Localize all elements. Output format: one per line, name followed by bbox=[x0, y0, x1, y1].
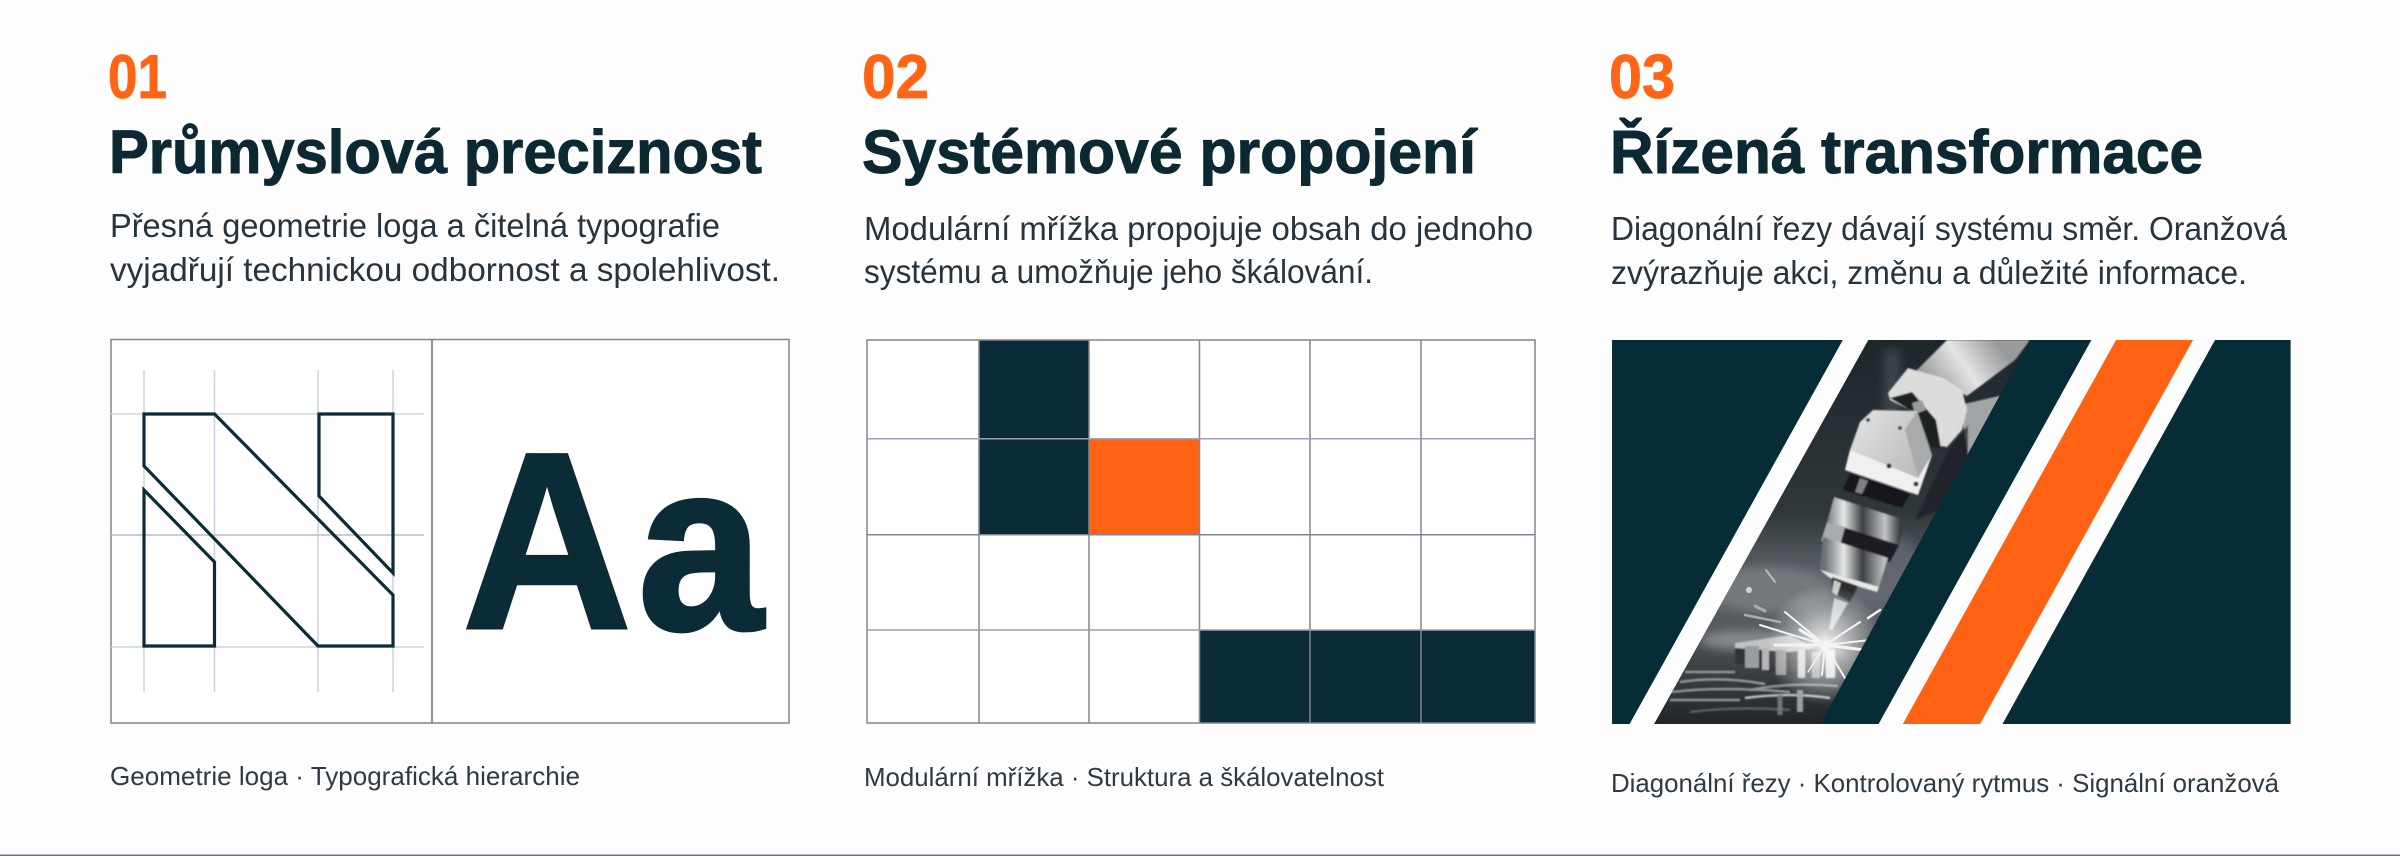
spindle dark cylinder bbox=[1843, 473, 1910, 508]
number 02: 02 bbox=[862, 43, 929, 112]
dark diagonal slab middle bbox=[1654, 340, 2091, 724]
tool holder bbox=[1832, 577, 1858, 602]
typography sample Aa bbox=[462, 401, 764, 682]
icon: outlined N logo bbox=[144, 414, 393, 646]
dark diagonal slab right bbox=[2002, 340, 2291, 724]
column 02: system connection bbox=[862, 43, 1535, 792]
column 03: controlled transformation bbox=[1609, 43, 2291, 798]
drill tip bbox=[1829, 598, 1848, 630]
table streaks bbox=[1670, 672, 1838, 715]
panel: logo geometry and typography bbox=[111, 340, 789, 723]
column 01: industrial precision bbox=[108, 43, 789, 791]
grid cell: orange highlight bbox=[1089, 439, 1200, 535]
description 02: systému a umožňuje jeho škálování. bbox=[864, 253, 1373, 290]
spindle ring 2 bbox=[1820, 537, 1888, 587]
description 03: zvýrazňuje akci, změnu a důležité informace. bbox=[1611, 254, 2247, 291]
description 03: Diagonální řezy dávají systému směr. Oranžová bbox=[1611, 210, 2288, 247]
heading 03: Řízená transformace bbox=[1610, 118, 2203, 186]
description 01: vyjadřují technickou odbornost a spolehlivost. bbox=[110, 251, 780, 288]
collar bbox=[1888, 368, 1967, 447]
caption 02: Modulární mřížka · Struktura a škálovatelnost bbox=[864, 762, 1385, 792]
spindle ring 1 bbox=[1827, 497, 1905, 545]
heading 01: Průmyslová preciznost bbox=[109, 118, 762, 186]
spindle dark section bbox=[1842, 528, 1900, 562]
sparks bbox=[1770, 589, 1876, 702]
panel: modular grid bbox=[867, 340, 1535, 723]
upper arm bbox=[1915, 340, 2030, 396]
description 02: Modulární mřížka propojuje obsah do jednoho bbox=[864, 210, 1533, 247]
typography sample Aa: a bbox=[638, 412, 764, 680]
caption 01: Geometrie loga · Typografická hierarchie bbox=[110, 761, 580, 791]
grid cells: dark row bbox=[1200, 630, 1535, 723]
heading 02: Systémové propojení bbox=[862, 118, 1478, 186]
background arm piece bbox=[1962, 394, 2000, 456]
joint band bbox=[1890, 392, 1941, 448]
grid cells: dark column bbox=[979, 340, 1089, 535]
hex block bbox=[1845, 409, 1932, 478]
number 03: 03 bbox=[1609, 43, 1675, 112]
machined blocks bbox=[1734, 648, 1836, 678]
description 01: Přesná geometrie loga a čitelná typografie bbox=[110, 207, 720, 244]
dark diagonal slab left bbox=[1612, 340, 1843, 724]
photo: robot arm with welding sparks bbox=[1650, 340, 2035, 724]
typography sample Aa: A bbox=[462, 401, 632, 682]
number 01: 01 bbox=[108, 43, 167, 112]
caption 03: Diagonální řezy · Kontrolovaný rytmus · Signální oranžová bbox=[1611, 768, 2280, 798]
orange diagonal stripe bbox=[1903, 340, 2193, 724]
panel: diagonal cuts bbox=[1612, 340, 2291, 724]
